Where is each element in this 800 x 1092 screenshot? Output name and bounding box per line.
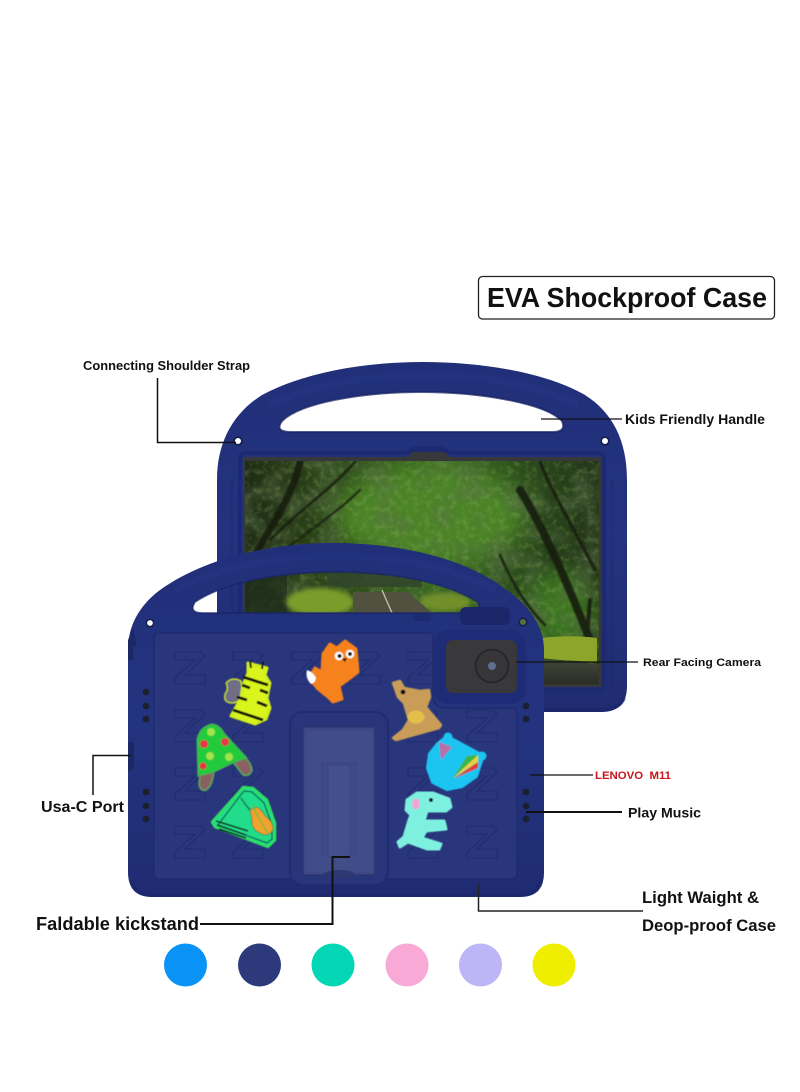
- embossed Z pattern: [175, 652, 497, 858]
- sticker: zebra: [225, 661, 270, 724]
- back case body with handle: [128, 543, 544, 897]
- callout: kids friendly handle: Kids Friendly Handle: [625, 412, 766, 427]
- title box: EVA Shockproof Case: [487, 282, 767, 313]
- sticker: piano and violin: [212, 787, 275, 847]
- callout: light weight drop-proof case: Deop-proof Case: [642, 917, 776, 935]
- strap hole right: [601, 437, 609, 445]
- infographic canvas: [37, 276, 776, 986]
- strap hole left: [234, 437, 242, 445]
- callout: connecting shoulder strap: [83, 359, 250, 442]
- sticker: kangaroo: [393, 681, 441, 740]
- strap hole left: [146, 619, 154, 627]
- case body with handle: [217, 362, 627, 712]
- channel around bezel: [240, 453, 604, 690]
- colour swatches: [164, 944, 576, 986]
- strap hole right: [519, 618, 527, 626]
- callout: usb-c port: Usa-C Port: [41, 799, 125, 816]
- lower grass and road: [542, 636, 597, 662]
- sticker: tree letter A: [197, 724, 252, 790]
- sticker: umbrella bag: [428, 732, 486, 789]
- callout: play music: Play Music: [628, 804, 701, 820]
- sticker: elephant letter E: [398, 793, 451, 849]
- foldable kickstand: [290, 712, 388, 885]
- screen bezel: [243, 452, 601, 687]
- speaker holes: [143, 689, 529, 822]
- inner textured panel: [154, 633, 517, 879]
- top notch: [413, 614, 431, 621]
- top slot: [460, 607, 510, 625]
- tablet screen forest photo: [245, 461, 599, 684]
- notch channel: [404, 446, 452, 453]
- callout: rear facing camera: Rear Facing Camera: [643, 657, 762, 669]
- tablet case front view: [217, 362, 627, 712]
- camera housing: [433, 630, 526, 704]
- sticker: fox: [306, 641, 358, 702]
- title box: [478, 276, 774, 319]
- callout: light weight drop-proof case: [478, 884, 776, 935]
- callout: foldable kickstand: Faldable kickstand: [36, 914, 199, 934]
- callout: lenovo m11: LENOVO M11: [595, 770, 671, 782]
- tablet case back view: [128, 543, 544, 897]
- callout: usb-c port: [41, 756, 131, 816]
- callout: foldable kickstand: [36, 857, 350, 934]
- side buttons: [128, 628, 137, 772]
- callout: light weight drop-proof case: Light Waight &: [642, 889, 759, 907]
- callout: connecting shoulder strap: Connecting Shoulder Strap: [83, 359, 250, 373]
